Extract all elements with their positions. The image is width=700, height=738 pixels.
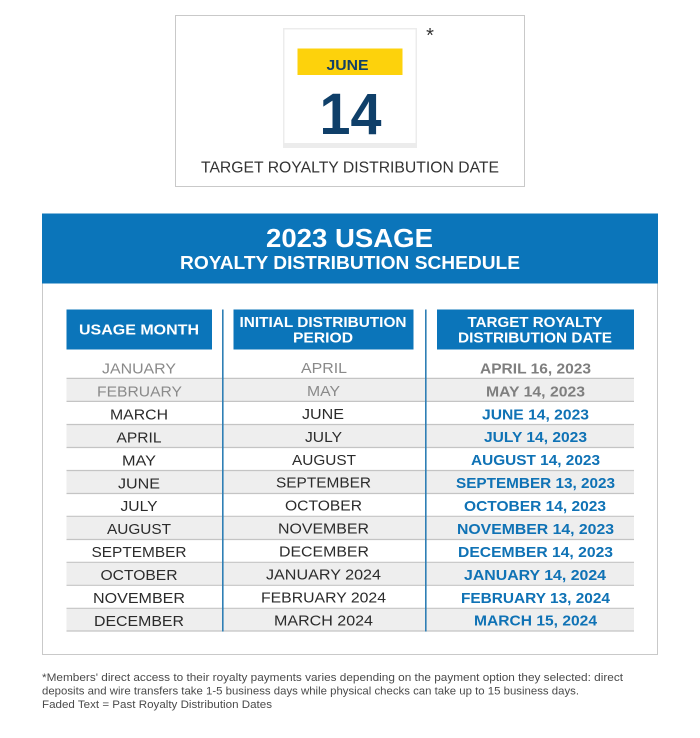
callout label: TARGET ROYALTY DISTRIBUTION DATE bbox=[201, 160, 499, 176]
footnote: Faded Text = Past Royalty Distribution Dates bbox=[42, 699, 273, 711]
column: target royalty distribution dates: DECEMBER 14, 2023 bbox=[458, 544, 613, 561]
column: target royalty distribution dates: NOVEMBER 14, 2023 bbox=[457, 521, 614, 538]
column: target royalty distribution dates bbox=[456, 360, 615, 630]
column: initial distribution periods: FEBRUARY 2024 bbox=[261, 589, 386, 606]
footnote: *Members' direct access to their royalty payments varies depending on the payment option they selected: direct bbox=[42, 672, 623, 684]
column: usage months: MARCH bbox=[110, 406, 168, 424]
heading band bbox=[42, 214, 658, 284]
heading band: 2023 USAGE bbox=[266, 225, 433, 253]
column: usage months: FEBRUARY bbox=[97, 384, 182, 400]
column: initial distribution periods: JANUARY 2024 bbox=[266, 566, 381, 583]
icon: calendar June 14: JUNE bbox=[326, 58, 369, 74]
column: initial distribution periods: AUGUST bbox=[292, 452, 356, 469]
heading band: ROYALTY DISTRIBUTION SCHEDULE bbox=[180, 253, 520, 273]
column: usage months: AUGUST bbox=[107, 521, 171, 538]
column header: initial distribution period bbox=[234, 310, 414, 350]
column: initial distribution periods bbox=[261, 360, 386, 629]
icon: calendar June 14: 14 bbox=[320, 82, 382, 147]
column: initial distribution periods: NOVEMBER bbox=[278, 521, 369, 538]
asterisk: * bbox=[426, 25, 434, 47]
column: usage months: OCTOBER bbox=[100, 567, 178, 584]
column: initial distribution periods: SEPTEMBER bbox=[276, 475, 371, 492]
column: target royalty distribution dates: FEBRUARY 13, 2024 bbox=[461, 590, 611, 607]
column: initial distribution periods: JUNE bbox=[302, 406, 344, 423]
panel: schedule bbox=[42, 214, 658, 654]
column header: initial distribution period: INITIAL DISTRIBUTION bbox=[240, 314, 406, 331]
column: initial distribution periods: APRIL bbox=[301, 360, 347, 377]
panel: target date callout bbox=[176, 16, 524, 186]
column: initial distribution periods: JULY bbox=[305, 429, 342, 446]
column: target royalty distribution dates: APRIL 16, 2023 bbox=[480, 360, 591, 378]
column: target royalty distribution dates: JUNE 14, 2023 bbox=[482, 406, 589, 423]
column header: target royalty distribution date: TARGET ROYALTY bbox=[468, 314, 602, 331]
icon: calendar June 14 bbox=[283, 28, 417, 148]
column: initial distribution periods: DECEMBER bbox=[279, 544, 369, 560]
footnote: deposits and wire transfers take 1-5 business days while physical checks can take up to 15 business days. bbox=[42, 686, 579, 698]
column: usage months: JANUARY bbox=[102, 360, 176, 378]
column: initial distribution periods: MAY bbox=[307, 383, 340, 400]
column: usage months: JULY bbox=[120, 498, 158, 515]
column: target royalty distribution dates: MAY 14, 2023 bbox=[486, 383, 585, 400]
column: target royalty distribution dates: AUGUST 14, 2023 bbox=[471, 452, 600, 469]
column header: usage month: USAGE MONTH bbox=[79, 322, 199, 338]
column header: target royalty distribution date: DISTRIBUTION DATE bbox=[458, 330, 612, 346]
column: target royalty distribution dates: JANUARY 14, 2024 bbox=[464, 567, 607, 584]
footnote bbox=[42, 672, 623, 711]
column: usage months: APRIL bbox=[116, 429, 162, 446]
column header: target royalty distribution date bbox=[437, 310, 634, 350]
column: target royalty distribution dates: OCTOBER 14, 2023 bbox=[464, 498, 606, 515]
column header: initial distribution period: PERIOD bbox=[293, 330, 353, 346]
column header: usage month bbox=[66, 310, 212, 350]
column: target royalty distribution dates: MARCH 15, 2024 bbox=[474, 613, 598, 630]
column: usage months: NOVEMBER bbox=[93, 590, 185, 607]
column: usage months: MAY bbox=[122, 452, 156, 469]
column: usage months: JUNE bbox=[118, 475, 160, 492]
column dividers bbox=[222, 310, 427, 632]
table row bands bbox=[66, 378, 634, 631]
column: initial distribution periods: OCTOBER bbox=[285, 498, 362, 515]
column: initial distribution periods: MARCH 2024 bbox=[274, 612, 373, 629]
column: usage months: SEPTEMBER bbox=[92, 544, 187, 561]
column: target royalty distribution dates: JULY 14, 2023 bbox=[484, 429, 587, 446]
column: usage months: DECEMBER bbox=[94, 613, 184, 630]
column: target royalty distribution dates: SEPTEMBER 13, 2023 bbox=[456, 475, 615, 492]
column: usage months bbox=[92, 360, 187, 630]
